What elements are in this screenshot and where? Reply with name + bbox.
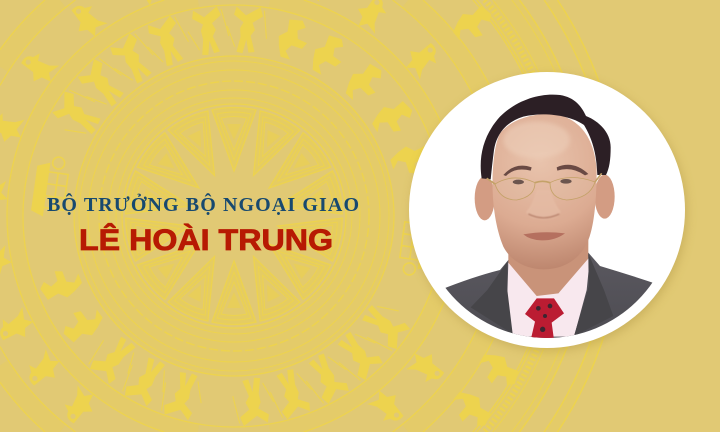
title: position: BỘ TRƯỞNG BỘ NGOẠI GIAO	[47, 193, 359, 216]
neck	[508, 238, 588, 297]
eyes	[513, 180, 524, 184]
portrait circle shadow	[411, 75, 687, 351]
drum feathered figures band	[31, 5, 437, 427]
portrait frame	[409, 72, 685, 348]
tie	[525, 298, 564, 340]
drum birds band	[0, 0, 449, 429]
drum star triangles	[123, 108, 345, 324]
face	[492, 114, 597, 269]
ears	[475, 176, 495, 220]
lapel shadows	[471, 262, 513, 334]
drum large birds band	[0, 0, 549, 432]
title: name: LÊ HOÀI TRUNG	[79, 223, 333, 257]
hair	[481, 95, 611, 179]
nose	[527, 205, 560, 217]
jacket	[446, 252, 652, 338]
mouth	[523, 232, 565, 240]
eyebrows	[503, 166, 532, 176]
glasses	[487, 173, 602, 200]
portrait photo	[446, 94, 652, 338]
shirt	[507, 257, 590, 337]
drum central medallion rings	[74, 56, 394, 376]
